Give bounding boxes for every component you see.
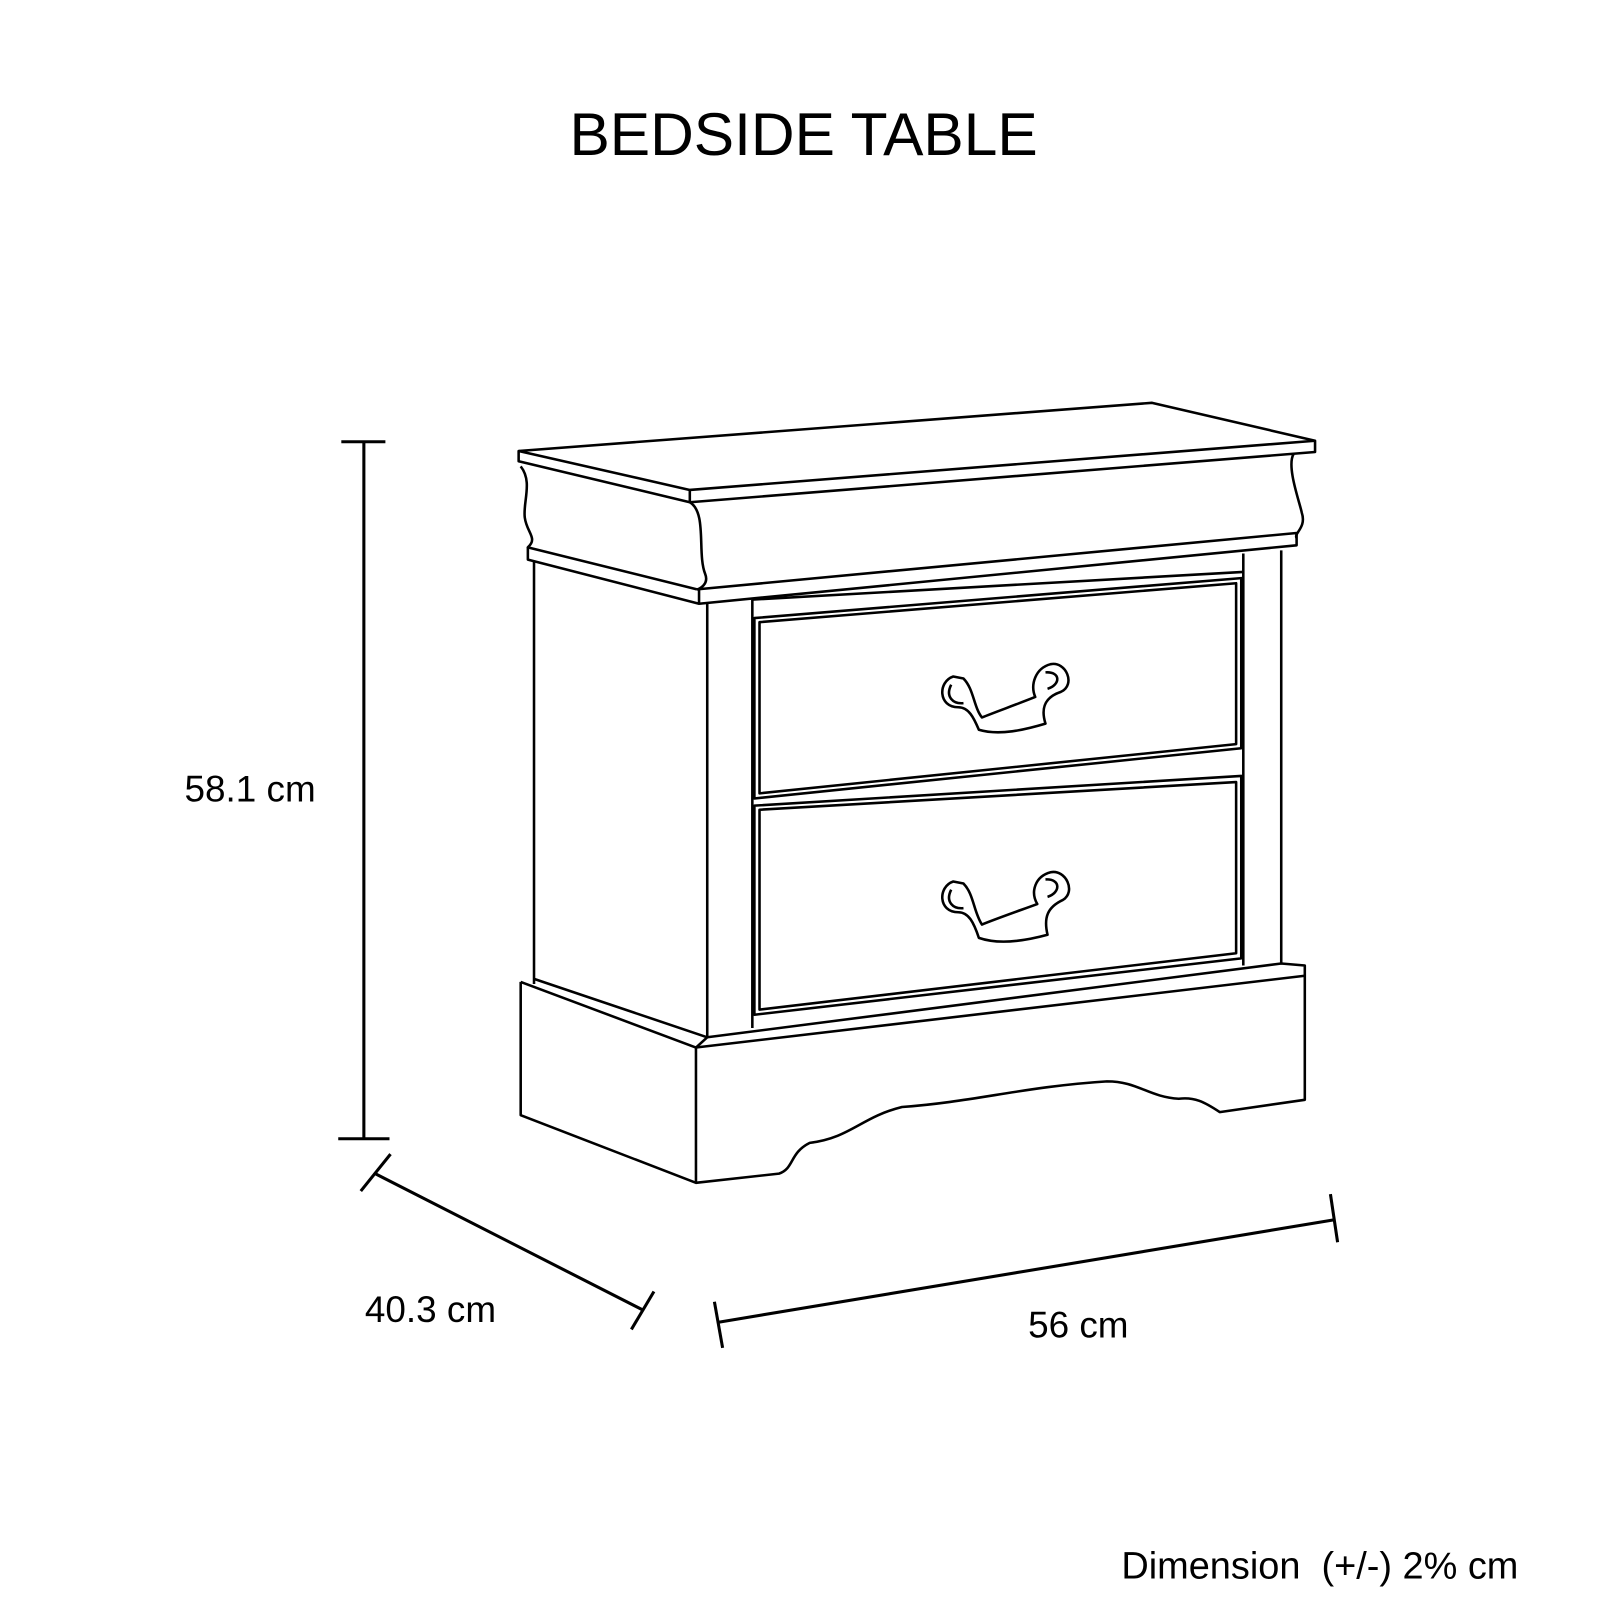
- footnote: Dimension (+/-) 2% cm: [1121, 1545, 1518, 1587]
- label: depth: 40.3 cm: [365, 1289, 496, 1330]
- dimension: width: [714, 1194, 1338, 1348]
- label: height: 58.1 cm: [185, 769, 316, 810]
- apron moulding: [521, 454, 1303, 604]
- dimension: depth: [361, 1154, 654, 1329]
- plinth: [521, 963, 1305, 1183]
- handle 1: [942, 664, 1068, 732]
- drawer 2: [754, 776, 1241, 1015]
- table top: [519, 403, 1315, 502]
- drawer 1: [754, 578, 1241, 798]
- dimension: height: [338, 442, 389, 1139]
- label: width: 56 cm: [1028, 1305, 1128, 1346]
- drawing: bedside table: [519, 403, 1315, 1183]
- handle 2: [942, 872, 1069, 942]
- title: BEDSIDE TABLE: [569, 100, 1038, 168]
- carcass: [534, 550, 1281, 1037]
